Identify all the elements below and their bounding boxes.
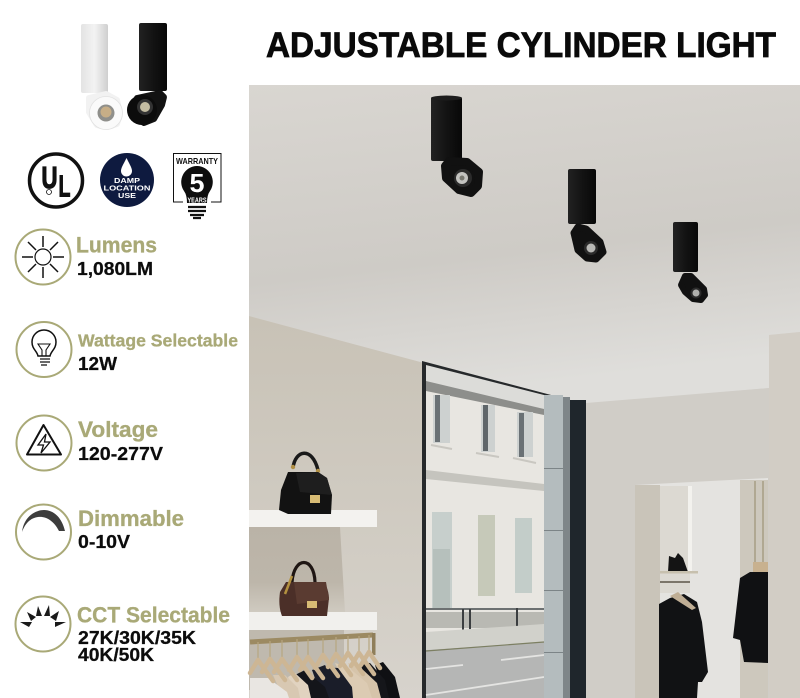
reflection band (426, 365, 544, 410)
badge: UL: L (58, 168, 70, 204)
panel: product photo of retail interior (249, 85, 800, 698)
icon: lightning triangle (16, 416, 72, 470)
ceiling light 3 (673, 222, 705, 300)
badge: damp location use (100, 153, 154, 207)
icon: light bulb (16, 322, 72, 377)
badge: damp location use: LOCATION (104, 184, 150, 192)
railing and sidewalk (426, 612, 544, 628)
ledge (426, 470, 544, 491)
badge: damp location use: DAMP (114, 176, 140, 185)
feature: wattage (16, 322, 238, 377)
handbag: brown (279, 562, 329, 616)
shoes (668, 553, 688, 572)
icon: sun (16, 230, 70, 284)
heading: Lumens (76, 232, 157, 258)
title: ADJUSTABLE CYLINDER LIGHT (266, 25, 776, 65)
icon: dimmer arc (16, 504, 71, 560)
badge: UL: U (42, 160, 58, 195)
heading: Dimmable (78, 506, 184, 531)
badge: damp location use: USE (118, 191, 136, 200)
values: 40K/50K (78, 645, 154, 665)
feature: voltage (16, 416, 163, 470)
clothing rail with hangers (250, 633, 400, 698)
hanging clothes right (733, 572, 768, 663)
badge: five year warranty (174, 154, 221, 218)
ceiling light 2 (568, 169, 603, 259)
heading: CCT Selectable (77, 602, 230, 628)
column (769, 332, 800, 698)
product image: white and black cylinder lights (81, 23, 167, 130)
value: 0-10V (78, 532, 130, 552)
hanging clothes left (659, 594, 708, 698)
lower windows (432, 512, 452, 608)
ceiling light 1 (431, 96, 479, 193)
badge: UL (30, 154, 82, 207)
values (78, 628, 196, 665)
icon: sunrise rays (16, 596, 70, 652)
building facade (426, 366, 544, 698)
badge: five year warranty: YEARS (188, 198, 207, 204)
ceiling (249, 85, 800, 404)
shelves with handbags (249, 453, 377, 690)
value: 12W (78, 354, 117, 374)
values: 27K/30K/35K (78, 628, 196, 648)
stone column (544, 395, 563, 698)
doorway (635, 478, 768, 698)
heading: Wattage Selectable (78, 330, 238, 350)
handbag: black (279, 453, 332, 514)
heading: Voltage (78, 417, 158, 442)
shop window with street view (422, 361, 586, 698)
feature: dimmable (16, 504, 184, 560)
badge: five year warranty: WARRANTY (176, 156, 218, 166)
badge: five year warranty: 5 (190, 168, 204, 198)
feature: cct selectable (16, 596, 230, 665)
value: 1,080LM (77, 259, 153, 279)
black fixture (127, 23, 167, 125)
feature: lumens (16, 230, 157, 284)
upper windows (433, 395, 450, 443)
left wall (249, 316, 424, 698)
white fixture (81, 24, 122, 130)
right wall (586, 388, 769, 698)
value: 120-277V (78, 444, 163, 464)
